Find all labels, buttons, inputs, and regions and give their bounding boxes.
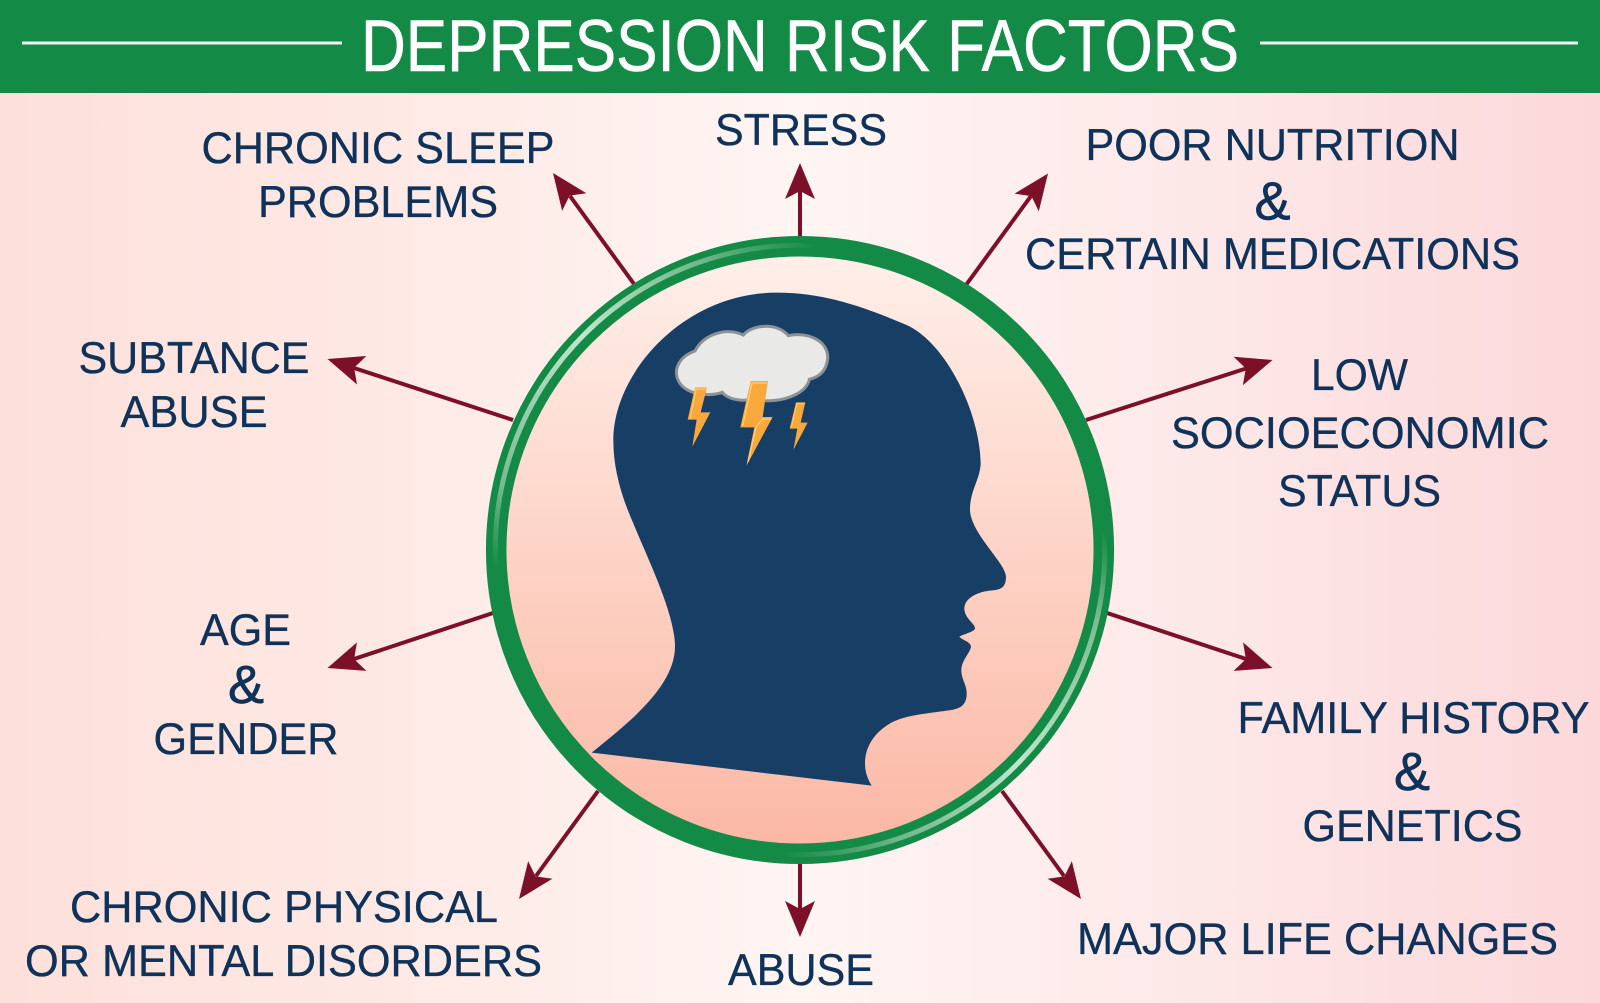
- lightning bolt: right: [790, 402, 808, 450]
- label: major life changes: MAJOR LIFE CHANGES: [1077, 915, 1558, 964]
- title: DEPRESSION RISK FACTORS: [361, 6, 1239, 87]
- label: age and gender: &: [228, 655, 264, 715]
- label: family history and genetics: GENETICS: [1302, 802, 1522, 851]
- label: poor nutrition and certain medications: POOR NUTRITION: [1086, 121, 1460, 170]
- header band: [0, 0, 1600, 93]
- arrow: substance abuse: [323, 345, 513, 420]
- label: age and gender: AGE: [200, 606, 291, 655]
- lightning bolt: middle: [740, 381, 773, 466]
- label: chronic sleep problems: CHRONIC SLEEP: [202, 124, 554, 173]
- central circle: [495, 245, 1105, 855]
- label: family history and genetics: [1238, 694, 1590, 851]
- arrow: age and gender: [323, 613, 493, 682]
- label: substance abuse: [78, 334, 310, 437]
- label: abuse: ABUSE: [728, 946, 874, 995]
- label: low socioeconomic status: SOCIOECONOMIC: [1171, 409, 1549, 458]
- arrows: [323, 163, 1277, 937]
- label: chronic physical or mental disorders: [25, 883, 542, 986]
- head silhouette: [592, 293, 1006, 786]
- arrow: family history: [1107, 613, 1277, 682]
- arrow: major life changes: [1002, 791, 1093, 908]
- label: family history and genetics: &: [1394, 742, 1430, 802]
- label: substance abuse: ABUSE: [120, 388, 268, 437]
- label: poor nutrition and certain medications: CERTAIN MEDICATIONS: [1025, 230, 1520, 279]
- label: poor nutrition and certain medications: [1025, 121, 1520, 279]
- arrow: chronic physical or mental disorders: [507, 791, 598, 908]
- lightning bolt: left: [688, 387, 710, 447]
- label: substance abuse: SUBTANCE: [78, 334, 310, 383]
- label: stress: STRESS: [715, 106, 887, 155]
- arrow: abuse: [785, 864, 815, 937]
- arrow: poor nutrition: [966, 165, 1060, 285]
- label: low socioeconomic status: STATUS: [1278, 467, 1441, 516]
- arrow: chronic sleep problems: [541, 164, 634, 284]
- label: chronic physical or mental disorders: CHRONIC PHYSICAL: [70, 883, 498, 932]
- label: low socioeconomic status: LOW: [1311, 351, 1408, 400]
- label: age and gender: [154, 606, 338, 764]
- icon: storm cloud with lightning: [676, 326, 828, 466]
- label: low socioeconomic status: [1171, 351, 1549, 516]
- label: chronic physical or mental disorders: OR MENTAL DISORDERS: [25, 937, 542, 986]
- label: poor nutrition and certain medications: &: [1254, 172, 1291, 232]
- arrow: low socioeconomic status: [1086, 346, 1277, 420]
- label: chronic sleep problems: [202, 124, 554, 227]
- label: age and gender: GENDER: [154, 715, 338, 764]
- cloud: [676, 326, 828, 401]
- label: family history and genetics: FAMILY HISTORY: [1238, 694, 1590, 743]
- label: chronic sleep problems: PROBLEMS: [258, 178, 498, 227]
- arrow: stress: [785, 163, 815, 237]
